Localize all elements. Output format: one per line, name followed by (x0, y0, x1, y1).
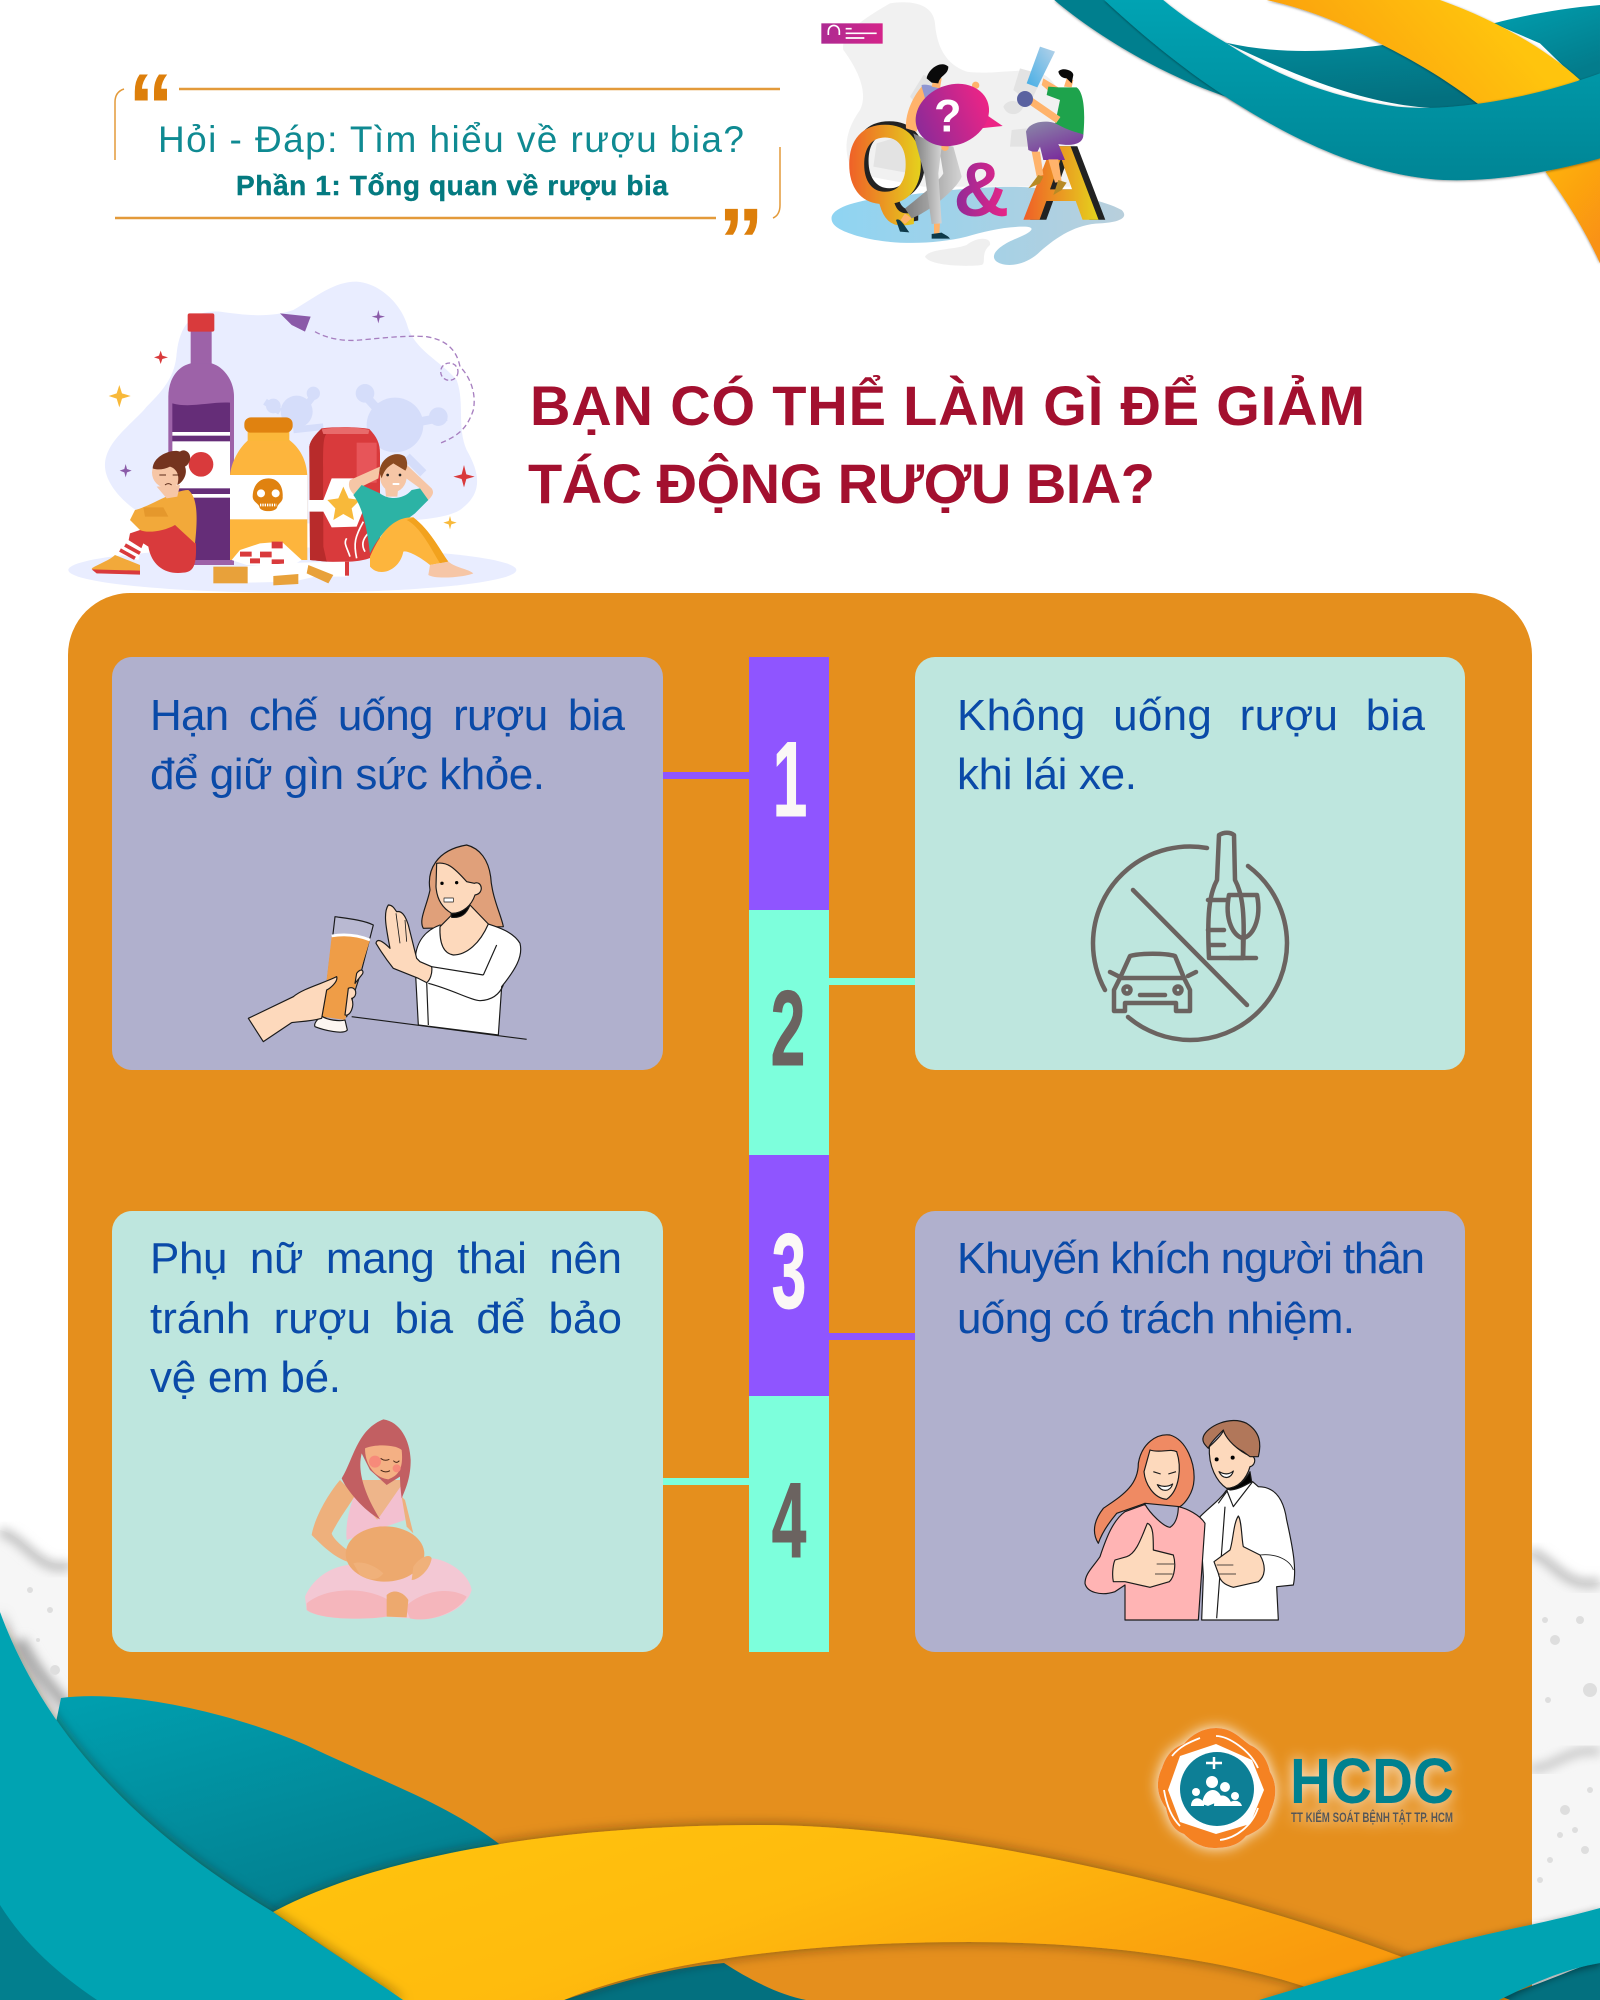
number 3: 3 (772, 1211, 806, 1331)
card 4 text: uống có trách nhiệm. (957, 1294, 1355, 1343)
number 2: 2 (771, 968, 805, 1088)
icon: no drinking and driving (1093, 833, 1287, 1040)
card 2 text (957, 691, 1426, 799)
dotted path and paper plane (315, 332, 474, 444)
logo subtitle: TT KIỂM SOÁT BỆNH TẬT TP. HCM (1291, 1808, 1453, 1825)
card 3 text (150, 1234, 622, 1402)
card 2 text: khi lái xe. (957, 750, 1137, 799)
illustration: pregnant woman (305, 1419, 472, 1619)
chat badge (821, 23, 883, 44)
opening quote: “ (128, 56, 174, 158)
connector 4 (663, 1478, 750, 1485)
heading line 2: TÁC ĐỘNG RƯỢU BIA? (528, 452, 1155, 515)
speech bubble (906, 73, 1003, 157)
blue floor blob (832, 187, 1124, 265)
card 3 text: vệ em bé. (150, 1353, 341, 1402)
illustration: couple thumbs up (1085, 1420, 1295, 1620)
card 4 text (957, 1234, 1425, 1343)
cigarettes (213, 542, 349, 585)
panel: card 3 pregnant women (112, 1211, 663, 1652)
orange main panel (68, 593, 1532, 2000)
connector 1 (663, 772, 750, 779)
card 3 text: tránh rượu bia để bảo (150, 1294, 622, 1343)
connector 3 (828, 1333, 916, 1340)
illustration: woman refusing beer (248, 845, 527, 1042)
faint skulls (265, 384, 448, 473)
speech bubble: ? (934, 90, 961, 141)
letter A: A (1021, 124, 1102, 243)
panel: card 4 encourage family (915, 1211, 1465, 1652)
connector 2 (828, 978, 916, 985)
sitting woman (92, 450, 197, 575)
logo: HCDC (1158, 1728, 1454, 1848)
bottom wave decoration (0, 1612, 1600, 2000)
background: foam texture (0, 1530, 1600, 1920)
person left (896, 64, 979, 239)
card 3 text: Phụ nữ mang thai nên (150, 1234, 622, 1283)
red can (308, 427, 380, 562)
closing quote: ” (718, 190, 764, 292)
illustration: bottles and tired people (68, 282, 516, 593)
ampersand: & (953, 147, 1009, 233)
main heading (528, 374, 1365, 515)
letter Q: Q (849, 99, 929, 224)
card 2 text: Không uống rượu bia (957, 691, 1426, 740)
title text: Hỏi - Đáp: Tìm hiểu về rượu bia? (158, 119, 744, 160)
top-right ribbon decoration (1054, 0, 1600, 263)
letter Q: Q (845, 102, 925, 227)
card 4 text: Khuyến khích người thân (957, 1234, 1425, 1283)
panel: card 2 no drink driving (915, 657, 1465, 1070)
background blob (105, 282, 477, 523)
number 4: 4 (772, 1460, 807, 1580)
purple bottle (168, 313, 234, 565)
sparkles (109, 310, 475, 529)
sitting man (349, 454, 473, 578)
subtitle text: Phần 1: Tổng quan về rượu bia (236, 170, 668, 201)
number column (749, 657, 829, 1652)
card 1 text (150, 691, 626, 799)
card 1 text: Hạn chế uống rượu bia (150, 691, 626, 740)
person right (1017, 47, 1084, 195)
panel: card 1 limit drinking (112, 657, 663, 1070)
heading line 1: BẠN CÓ THỂ LÀM GÌ ĐỂ GIẢM (530, 374, 1365, 437)
logo name: HCDC (1290, 1745, 1454, 1817)
letter A: A (1027, 124, 1108, 243)
title frame (115, 56, 780, 292)
logo mark (1158, 1728, 1275, 1848)
frame lines (115, 89, 780, 218)
illustration: Q&A (821, 2, 1124, 266)
number 1: 1 (773, 719, 807, 839)
card 1 text: để giữ gìn sức khỏe. (150, 750, 545, 799)
yellow bottle (230, 417, 307, 560)
